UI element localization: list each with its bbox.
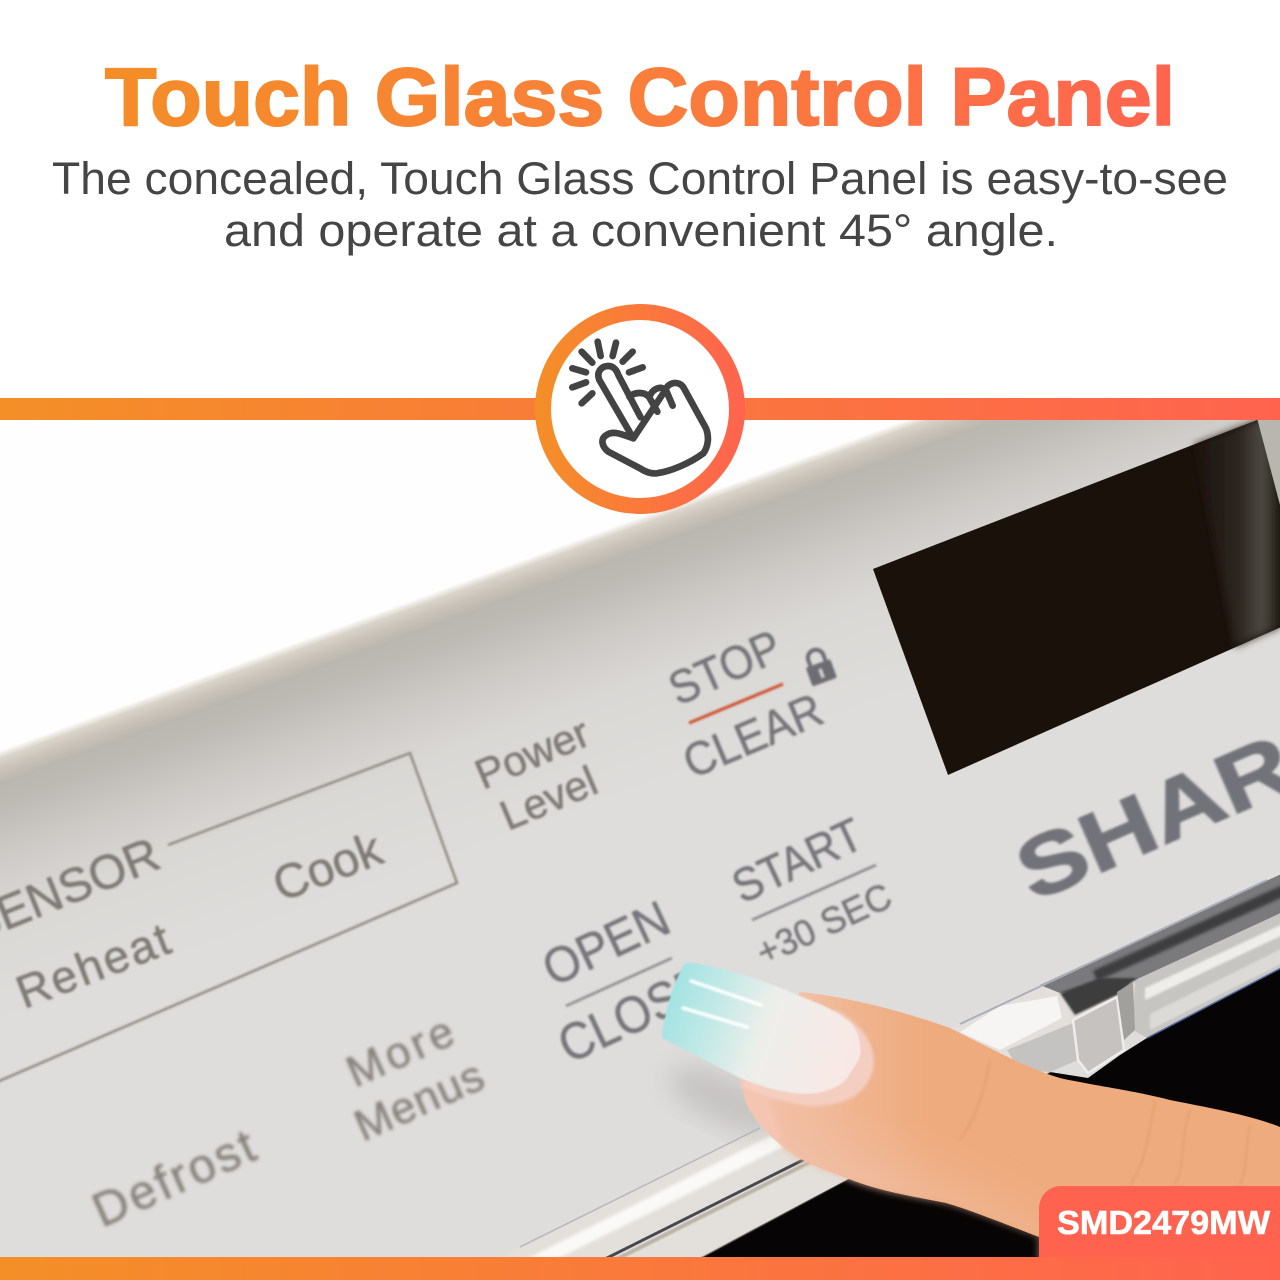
nail highlights bbox=[683, 981, 761, 1027]
model number badge bbox=[1039, 1186, 1280, 1257]
model number badge: SMD2479MW bbox=[1057, 1204, 1271, 1241]
subtitle text block: and operate at a convenient 45° angle. bbox=[224, 205, 1058, 256]
label: Reheat: Reheat bbox=[9, 912, 177, 1018]
display window bbox=[873, 418, 1280, 775]
finger shadow bbox=[668, 1062, 773, 1142]
product photo: control panel with finger bbox=[0, 418, 1280, 1262]
icon: lock bbox=[801, 646, 837, 687]
label: +30 SEC: +30 SEC bbox=[750, 875, 898, 973]
icon: touch hand in ring bbox=[543, 312, 737, 506]
fingernail bbox=[662, 963, 861, 1094]
blurred left labels bbox=[90, 1022, 486, 1228]
subtitle text block: The concealed, Touch Glass Control Panel is easy-to-see bbox=[52, 153, 1228, 204]
stop clear divider bbox=[689, 684, 783, 723]
label: More Menus: Menus bbox=[347, 1051, 491, 1151]
control panel surface bbox=[0, 420, 1280, 1257]
subtitle text block bbox=[52, 153, 1228, 256]
label: More Menus bbox=[344, 1022, 486, 1142]
label: CLEAR: CLEAR bbox=[675, 682, 830, 788]
bottom bar bbox=[0, 1257, 1280, 1280]
label: CLOSE: CLOSE bbox=[550, 955, 719, 1075]
lower trim, hinge rail and dark gap bbox=[494, 870, 1280, 1262]
title: Touch Glass Control Panel bbox=[105, 52, 1175, 143]
label: START: START bbox=[724, 807, 870, 913]
finger bbox=[740, 992, 1280, 1262]
top divider bar bbox=[0, 398, 1280, 420]
panel button labels bbox=[0, 708, 604, 1085]
finger creases bbox=[960, 1060, 1250, 1185]
sensor cook box bbox=[0, 753, 457, 1085]
label: More Menus: More bbox=[339, 1007, 461, 1097]
label: STOP: STOP bbox=[661, 619, 789, 715]
label: Power Level bbox=[474, 722, 600, 831]
label: OPEN: OPEN bbox=[534, 890, 678, 997]
open divider bbox=[566, 958, 672, 1006]
start divider bbox=[752, 865, 876, 920]
label: Cook: Cook bbox=[266, 822, 390, 912]
nail cuticle bbox=[740, 1010, 874, 1106]
label: Defrost: Defrost bbox=[85, 1120, 264, 1238]
label: Power Level: Power bbox=[468, 708, 596, 798]
label: Power Level: Level bbox=[493, 757, 604, 839]
